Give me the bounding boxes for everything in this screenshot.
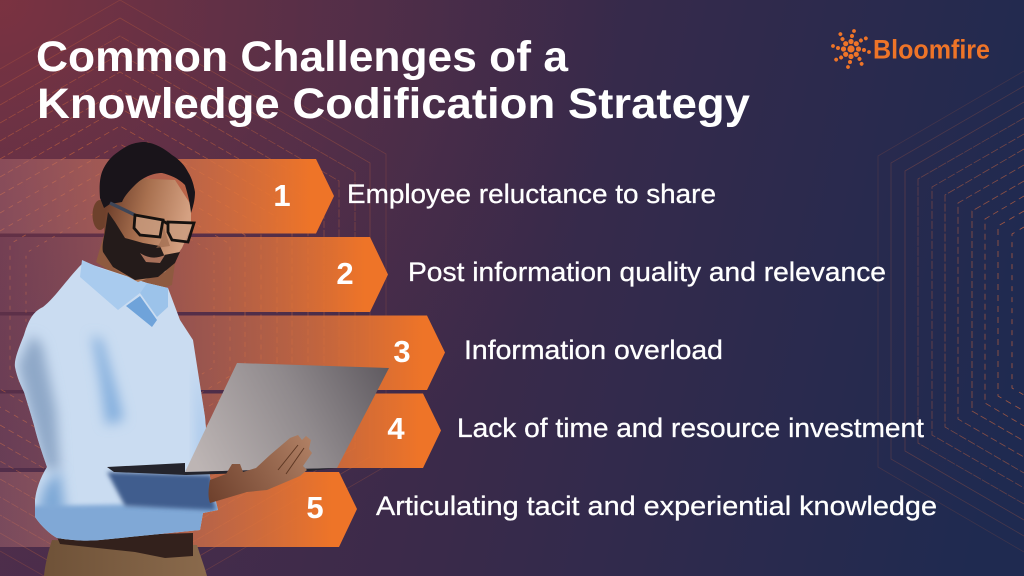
hair [100,142,195,213]
label 2: Post information quality and relevance [408,257,886,287]
hand [208,435,312,503]
title: Knowledge Codification Strategy [37,80,750,128]
title [36,33,750,128]
smile [140,253,165,263]
number 4: 4 [387,411,405,446]
number 2: 2 [336,256,354,291]
label 4: Lack of time and resource investment [457,413,925,443]
arrow 4 [0,394,441,468]
number 3: 3 [393,334,411,369]
shirt shading [18,335,220,545]
label 5: Articulating tacit and experiential knowledge [376,491,937,521]
label 1: Employee reluctance to share [347,179,716,209]
decorative hexagon pattern: right [878,71,1024,552]
collar [80,260,168,327]
label 3: Information overload [464,335,723,365]
shirt [15,262,220,545]
man with laptop [15,142,389,576]
laptop lid [185,363,389,472]
arrow 3 [0,316,445,390]
logo: Bloomfire [831,29,990,69]
number 5: 5 [306,490,324,525]
trousers [44,540,207,576]
nose shade [156,225,170,248]
ear [92,200,108,230]
laptop base [107,463,337,475]
face [104,178,191,282]
title: Common Challenges of a [36,33,569,81]
arrow 1 [0,159,334,234]
wordmark: Bloomfire [873,34,990,64]
glasses [110,203,194,242]
arrow 2 [0,237,388,312]
finger gaps [278,445,304,474]
neck [96,235,176,294]
number 1: 1 [273,178,291,213]
icon: sunburst [831,29,871,69]
laptop [107,363,389,475]
arrow 5 [0,472,357,547]
beard [103,212,180,280]
decorative hexagon pattern: left [0,0,386,576]
belt [57,533,193,558]
shirt body [15,262,218,541]
